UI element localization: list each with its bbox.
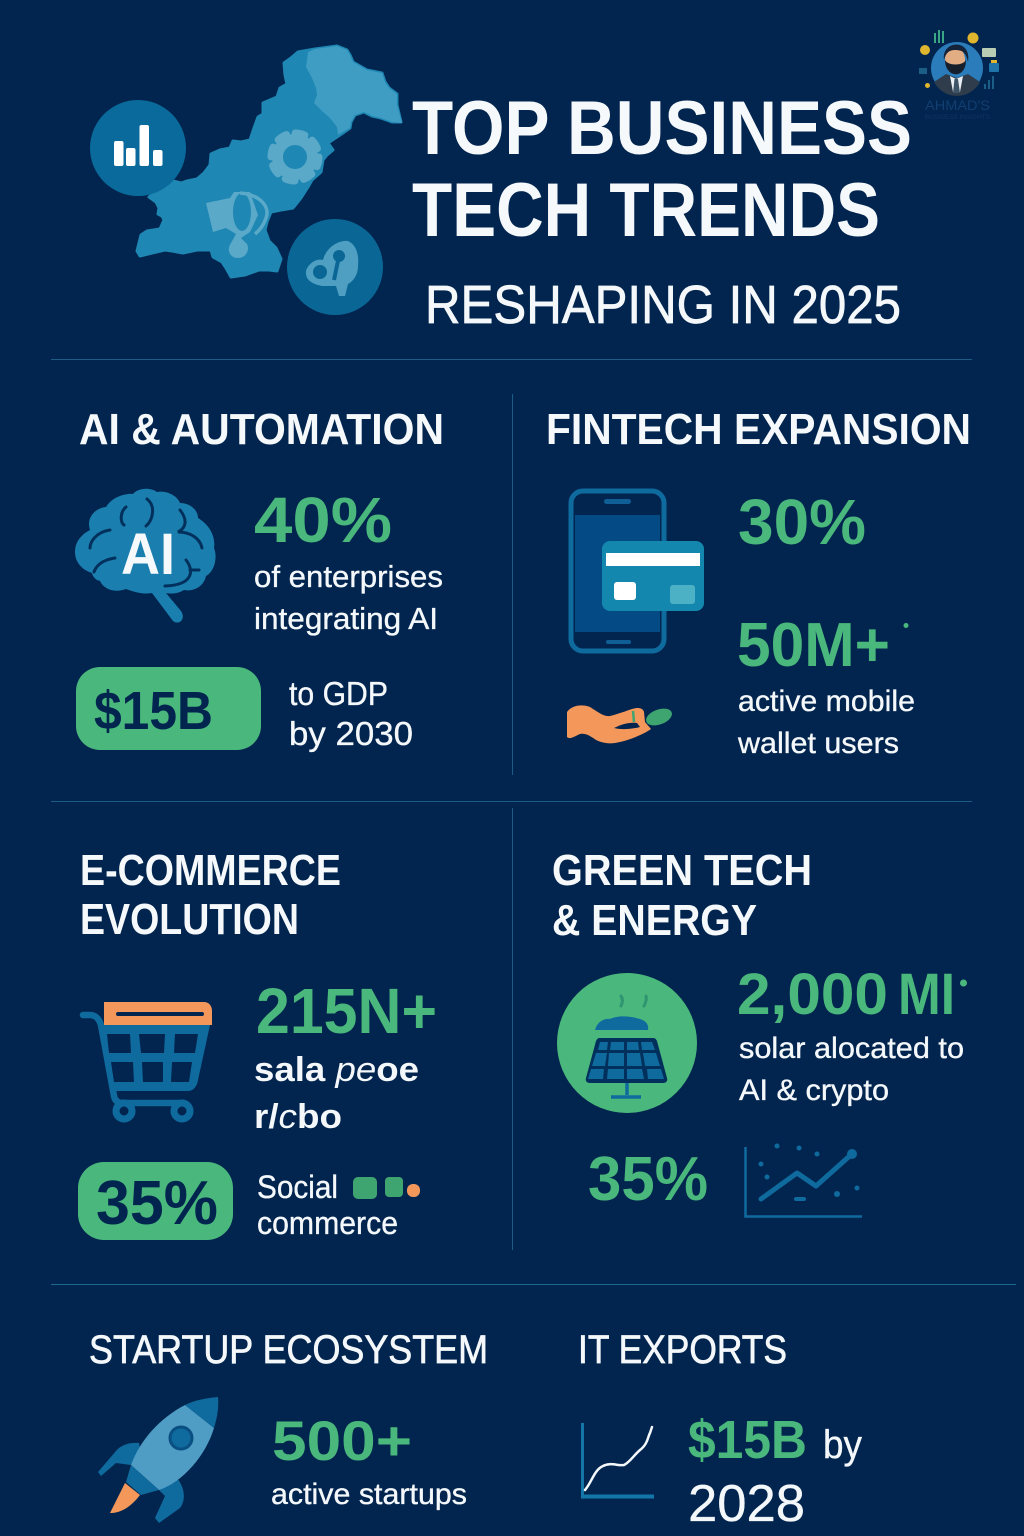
heading: e-commerce evolution: EVOLUTION — [80, 895, 299, 944]
icon: social chips — [353, 1177, 420, 1199]
title: TECH TRENDS — [412, 168, 880, 253]
stat label: solar alocated to — [739, 1032, 964, 1065]
heading: AI & automation: AI & AUTOMATION — [79, 405, 444, 454]
badge: 35%: 35% — [96, 1169, 218, 1238]
icon: phone with card — [571, 491, 704, 651]
panel: startup ecosystem — [89, 1328, 488, 1523]
stat label: of enterprises — [254, 559, 443, 594]
icon: gear — [271, 133, 319, 181]
logo: Ahmad's avatar: AHMAD'S — [925, 98, 990, 113]
icon: hand with banknote — [567, 705, 674, 743]
icon: solar panel — [557, 973, 697, 1113]
heading: green tech and energy: GREEN TECH — [552, 846, 812, 895]
stat: $15B by 2028: $15B — [688, 1410, 807, 1470]
heading: green tech and energy: & ENERGY — [552, 896, 757, 945]
header map illustration — [90, 46, 402, 315]
icon: AI brain: AI — [121, 522, 175, 587]
title — [412, 86, 912, 335]
stat: 2,000 MI: MI — [898, 962, 955, 1027]
badge label: to GDP — [289, 675, 388, 712]
title: TOP BUSINESS — [412, 86, 912, 171]
icon: rocket — [98, 1397, 218, 1523]
badge label: by 2030 — [289, 715, 413, 752]
stat: 500+: 500+ — [272, 1409, 412, 1472]
stat: $15B by 2028: 2028 — [688, 1475, 805, 1533]
badge: $15B: $15B — [94, 681, 213, 741]
title: RESHAPING IN 2025 — [425, 275, 901, 335]
heading: green tech and energy — [552, 846, 812, 945]
logo: Ahmad's avatar — [919, 30, 999, 121]
stat: 50M+: 50M+ — [737, 611, 890, 680]
logo: Ahmad's avatar: BUSINESS INSIGHTS — [925, 115, 990, 121]
stat label: sala peoe — [254, 1051, 419, 1089]
stat label: AI & crypto — [739, 1074, 889, 1107]
badge label — [257, 1169, 398, 1241]
heading: startup ecosystem: STARTUP ECOSYSTEM — [89, 1328, 488, 1372]
icon: thumb shape — [206, 192, 267, 258]
chart: export growth line — [581, 1423, 654, 1496]
stat label — [254, 1051, 419, 1136]
chart: rising trend line — [746, 1144, 862, 1216]
badge: $15B — [76, 667, 261, 750]
stat label: active mobile — [738, 685, 915, 718]
stat label — [254, 559, 443, 636]
icon: bar chart circle — [90, 100, 186, 196]
heading: e-commerce evolution — [80, 846, 341, 944]
stat: 2,000 MI: 2,000 — [737, 962, 888, 1027]
panel: green tech and energy — [552, 846, 967, 1216]
stat label: integrating AI — [254, 601, 438, 636]
stat: 215N+: 215N+ — [256, 975, 437, 1047]
heading: IT exports: IT EXPORTS — [578, 1328, 787, 1372]
stat label: wallet users — [737, 727, 899, 760]
stat: $15B by 2028: by — [823, 1423, 862, 1467]
icon: AI brain — [75, 489, 216, 623]
badge label: Social — [257, 1169, 338, 1205]
stat label: active startups — [271, 1478, 467, 1511]
stat: $15B by 2028 — [688, 1410, 862, 1533]
badge label: commerce — [257, 1205, 398, 1241]
stat: 35%: 35% — [588, 1145, 708, 1214]
stat label — [737, 685, 915, 760]
panel: fintech expansion — [546, 405, 971, 760]
stat label — [739, 1032, 964, 1107]
panel: IT exports — [578, 1328, 862, 1533]
stat: 2,000 MI — [737, 962, 967, 1027]
stat label: r/cbo — [254, 1098, 342, 1136]
heading: e-commerce evolution: E-COMMERCE — [80, 846, 341, 895]
icon: shopping cart — [83, 1002, 212, 1119]
stat: 40%: 40% — [254, 484, 392, 556]
icon: blob circle — [287, 219, 383, 315]
map of Pakistan — [137, 46, 402, 277]
stat: 30%: 30% — [738, 486, 866, 558]
panel: e-commerce evolution — [78, 846, 437, 1241]
heading: fintech expansion: FINTECH EXPANSION — [546, 405, 971, 454]
panel: AI & automation — [75, 405, 444, 752]
badge label — [289, 675, 413, 752]
